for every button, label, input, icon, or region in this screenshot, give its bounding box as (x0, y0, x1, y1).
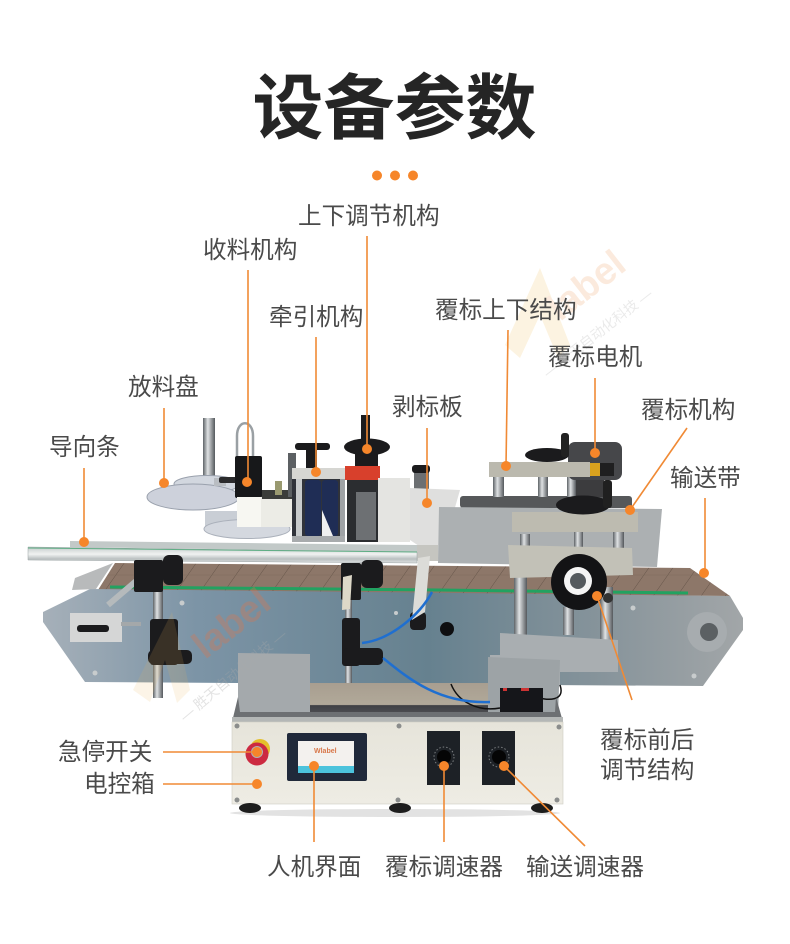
callout: 覆标机构 (625, 397, 735, 515)
labelling machine (28, 415, 743, 817)
callout: 导向条: 导向条 (49, 434, 120, 461)
watermark: lower left (133, 581, 289, 724)
guide rail (28, 541, 417, 563)
control box (232, 697, 563, 813)
watermark: upper right: label (540, 243, 634, 329)
callout: 覆标前后调节结构 (592, 591, 694, 784)
callout: 覆标上下结构: 覆标上下结构 (435, 297, 577, 324)
callout: 导向条 (49, 434, 120, 547)
shadow under machine (230, 809, 560, 817)
callout: 人机界面: 人机界面 (267, 854, 361, 881)
conveyor belt (98, 563, 730, 596)
photo sensor (500, 688, 543, 713)
peeling plate (400, 465, 460, 561)
callout: 剥标板: 剥标板 (392, 394, 463, 421)
callout: 放料盘: 放料盘 (128, 374, 199, 401)
callout: 上下调节机构 (298, 203, 440, 454)
label reel discs (147, 418, 290, 538)
panel hole (410, 556, 454, 636)
callout: 急停开关 (58, 739, 262, 766)
side handwheel (551, 554, 613, 610)
plate rivets (92, 600, 696, 678)
middle guide clamps (341, 560, 383, 710)
title: 设备参数 (252, 70, 537, 149)
traction unit (288, 443, 345, 542)
callout: 电控箱 (84, 771, 262, 798)
watermark: lower left: — 胜天自动化科技 — (177, 626, 289, 724)
callout: 上下调节机构: 上下调节机构 (298, 203, 440, 230)
left guide clamps (134, 555, 192, 698)
callout: 覆标调速器 (385, 761, 503, 881)
callout: 放料盘 (128, 374, 199, 488)
callout: 覆标电机: 覆标电机 (548, 344, 643, 371)
callout: 覆标电机 (548, 344, 643, 458)
vertical adjustment unit (344, 415, 410, 542)
front label head (490, 480, 638, 686)
callout: 覆标前后调节结构: 调节结构 (600, 757, 694, 784)
callout: 人机界面 (267, 761, 361, 881)
conveyor body plate (43, 589, 743, 686)
callout: 剥标板 (392, 394, 463, 508)
title dots (372, 170, 418, 180)
callout: 收料机构 (203, 237, 297, 487)
roller flange (687, 612, 727, 652)
mounting bracket (238, 653, 310, 717)
callout: 覆标上下结构 (435, 297, 577, 471)
speed controller: conveyor (482, 731, 515, 785)
blue air hoses (362, 592, 490, 702)
green strip (110, 587, 688, 593)
middle recess (310, 683, 490, 718)
touch screen: Wlabel (314, 748, 337, 755)
speed controller: labelling (427, 731, 460, 785)
watermark: upper right: — 胜天自动化科技 — (540, 285, 655, 380)
rewind unit (235, 423, 297, 527)
watermark: upper right (505, 243, 655, 380)
upper label head (460, 433, 632, 508)
emergency stop button (246, 739, 270, 766)
callout: 输送调速器: 输送调速器 (526, 854, 644, 881)
touch screen (287, 733, 367, 781)
label head plate (438, 507, 662, 567)
callout: 覆标机构: 覆标机构 (641, 397, 735, 424)
callout: 急停开关: 急停开关 (58, 739, 152, 766)
watermark: lower left: label (185, 581, 279, 667)
callout: 输送调速器 (499, 761, 644, 881)
callout: 电控箱: 电控箱 (84, 771, 155, 798)
callout: 输送带 (670, 465, 741, 578)
callout: 牵引机构: 牵引机构 (269, 304, 363, 331)
belt left end (72, 563, 113, 590)
callout: 覆标前后调节结构: 覆标前后 (600, 727, 694, 754)
left bracket (70, 576, 142, 642)
callout: 收料机构: 收料机构 (203, 237, 297, 264)
callout: 输送带: 输送带 (670, 465, 741, 492)
black cable (451, 684, 561, 709)
callout: 牵引机构 (269, 304, 363, 477)
callout: 覆标调速器: 覆标调速器 (385, 854, 503, 881)
right bracket (488, 657, 560, 716)
